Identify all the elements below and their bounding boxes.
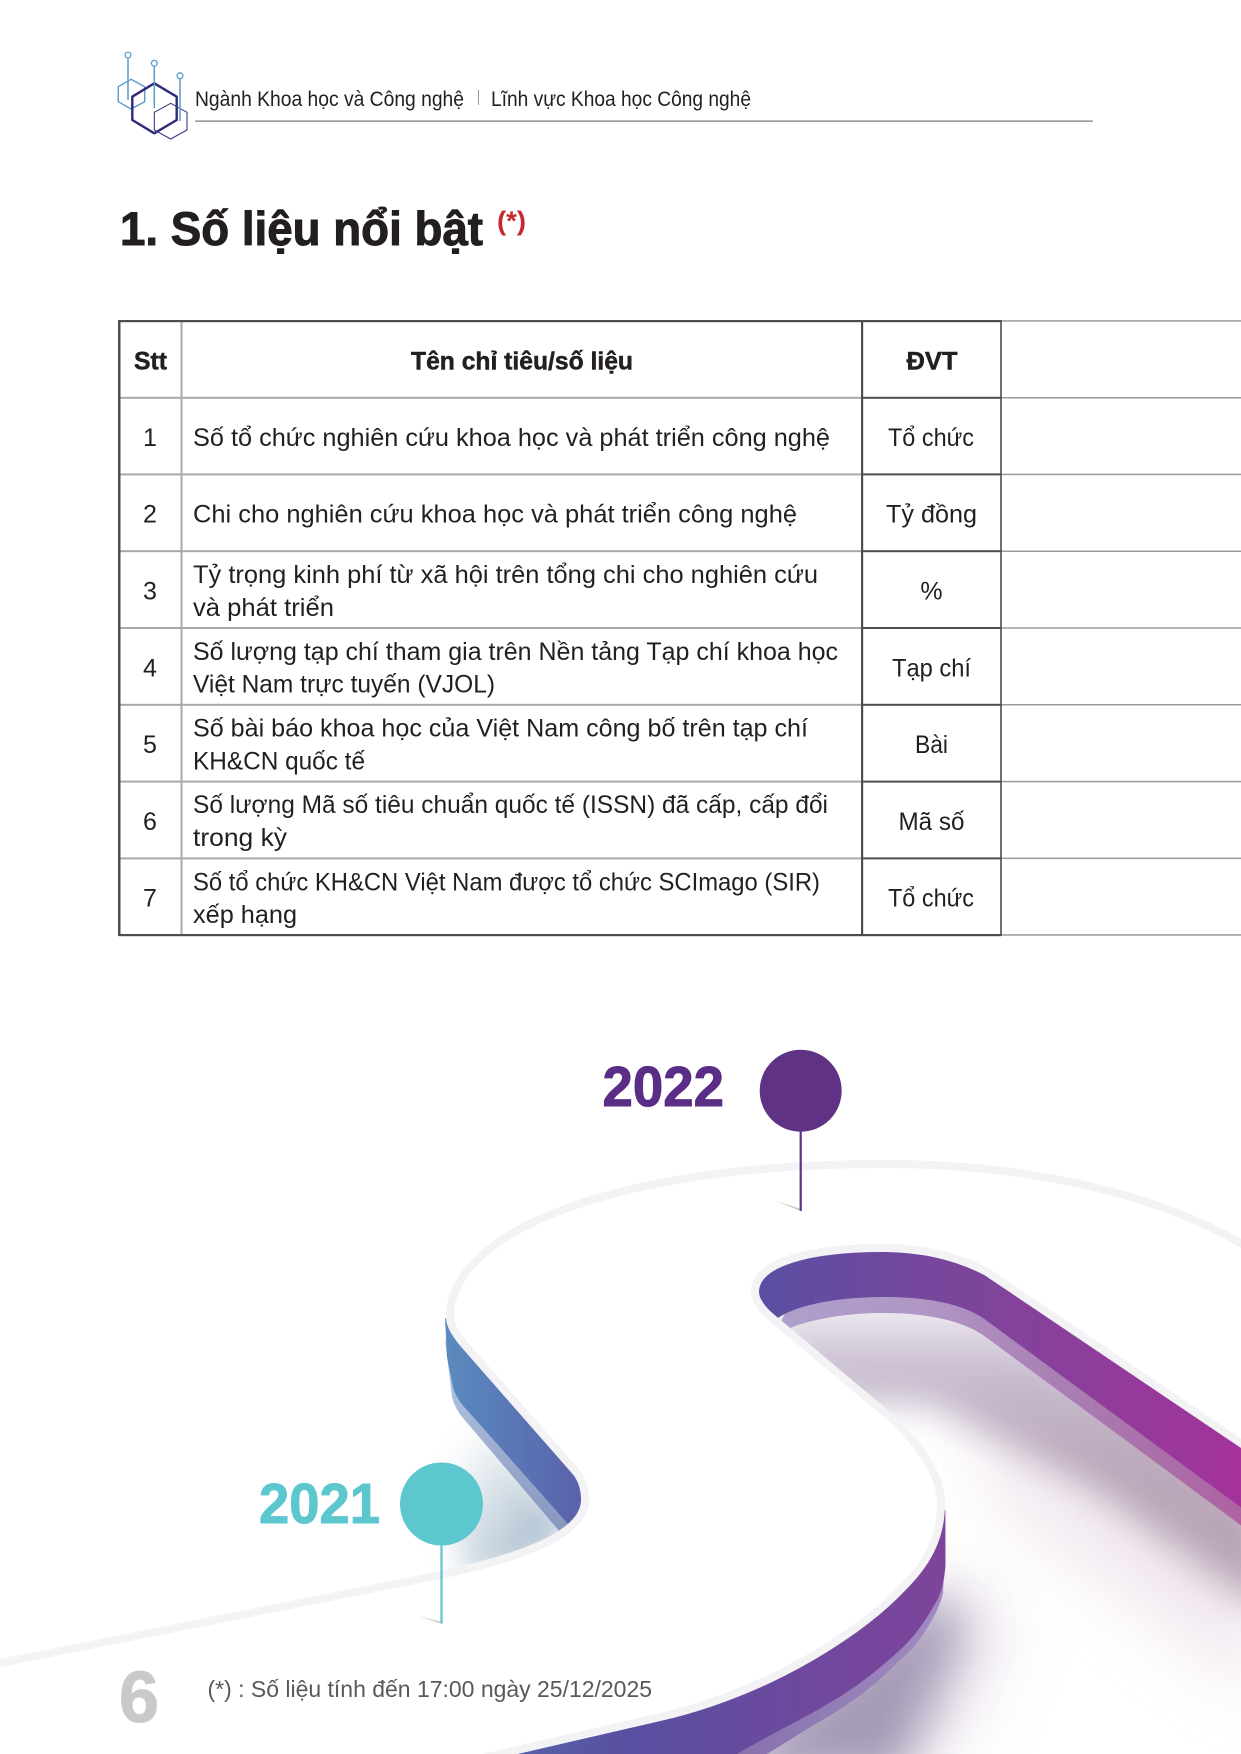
milestone 2022 [602,1050,842,1211]
road top surface [0,1164,1241,1754]
table row numbers: 2 [143,501,157,529]
logo: hexagons with pins [118,52,187,139]
table indicator names: xếp hạng [193,901,297,929]
table indicator names: Số bài báo khoa học của Việt Nam công bố trên tạp chí [193,715,808,743]
table units: Tạp chí [892,654,971,682]
table units: % [920,578,943,606]
table units: Tổ chức [888,885,974,913]
page number: 6 [119,1658,159,1738]
table indicator names: trong kỳ [193,824,288,852]
left wall [445,1318,595,1524]
table units: Mã số [898,808,965,836]
table header row: Stt [134,348,168,376]
milestone 2022: 2022 [602,1055,724,1119]
table row numbers: 3 [143,578,157,606]
table row numbers: 1 [143,424,157,452]
milestone 2021 [259,1462,483,1624]
table indicator names: KH&CN quốc tế [193,748,365,776]
footnote: (*) : Số liệu tính đến 17:00 ngày 25/12/2025 [208,1676,652,1702]
table indicator names: và phát triển [193,594,334,622]
table indicator names: Số lượng Mã số tiêu chuẩn quốc tế (ISSN) đã cấp, cấp đổi [193,791,828,819]
table units: Tỷ đồng [886,501,977,529]
table header row: Tên chỉ tiêu/số liệu [411,348,633,376]
table indicator names: Số lượng tạp chí tham gia trên Nền tảng Tạp chí khoa học [193,638,838,666]
table indicator names [193,424,838,929]
table row numbers: 4 [143,654,157,682]
table units: Tổ chức [888,424,974,452]
table indicator names: Chi cho nghiên cứu khoa học và phát triển công nghệ [193,501,797,529]
left wall light strip [445,1340,578,1532]
title: 1. Số liệu nổi bật [120,202,483,255]
table row numbers: 7 [143,885,157,913]
table row numbers: 5 [143,731,157,759]
inner wall [745,1235,1241,1514]
table indicator names: Việt Nam trực tuyến (VJOL) [193,671,495,699]
road shadow: bottom [700,1570,1010,1754]
table units [886,424,977,913]
header: sector and field: Lĩnh vực Khoa học Công nghệ [491,88,751,111]
header: sector and field: Ngành Khoa học và Công nghệ [195,88,464,111]
outer wall [470,1500,946,1754]
table indicator names: Số tổ chức KH&CN Việt Nam được tổ chức SCImago (SIR) [193,869,820,897]
table header row: ĐVT [906,348,958,376]
table row numbers: 6 [143,808,157,836]
table indicator names: Tỷ trọng kinh phí từ xã hội trên tổng chi cho nghiên cứu [193,561,818,589]
table units: Bài [915,731,948,759]
road shadow: upper right [760,1300,1241,1700]
inner wall light strip [775,1280,1241,1532]
table: key indicators [118,320,1241,936]
table indicator names: Số tổ chức nghiên cứu khoa học và phát triển công nghệ [193,424,830,452]
timeline road graphic [0,1164,1241,1754]
road shadow: left [432,1400,570,1580]
table header row [134,348,958,376]
outer wall light strip [700,1550,945,1754]
header: sector and field [195,88,1093,122]
milestone 2021: 2021 [259,1472,380,1536]
title: (*) [497,206,526,236]
table row numbers [143,424,157,913]
